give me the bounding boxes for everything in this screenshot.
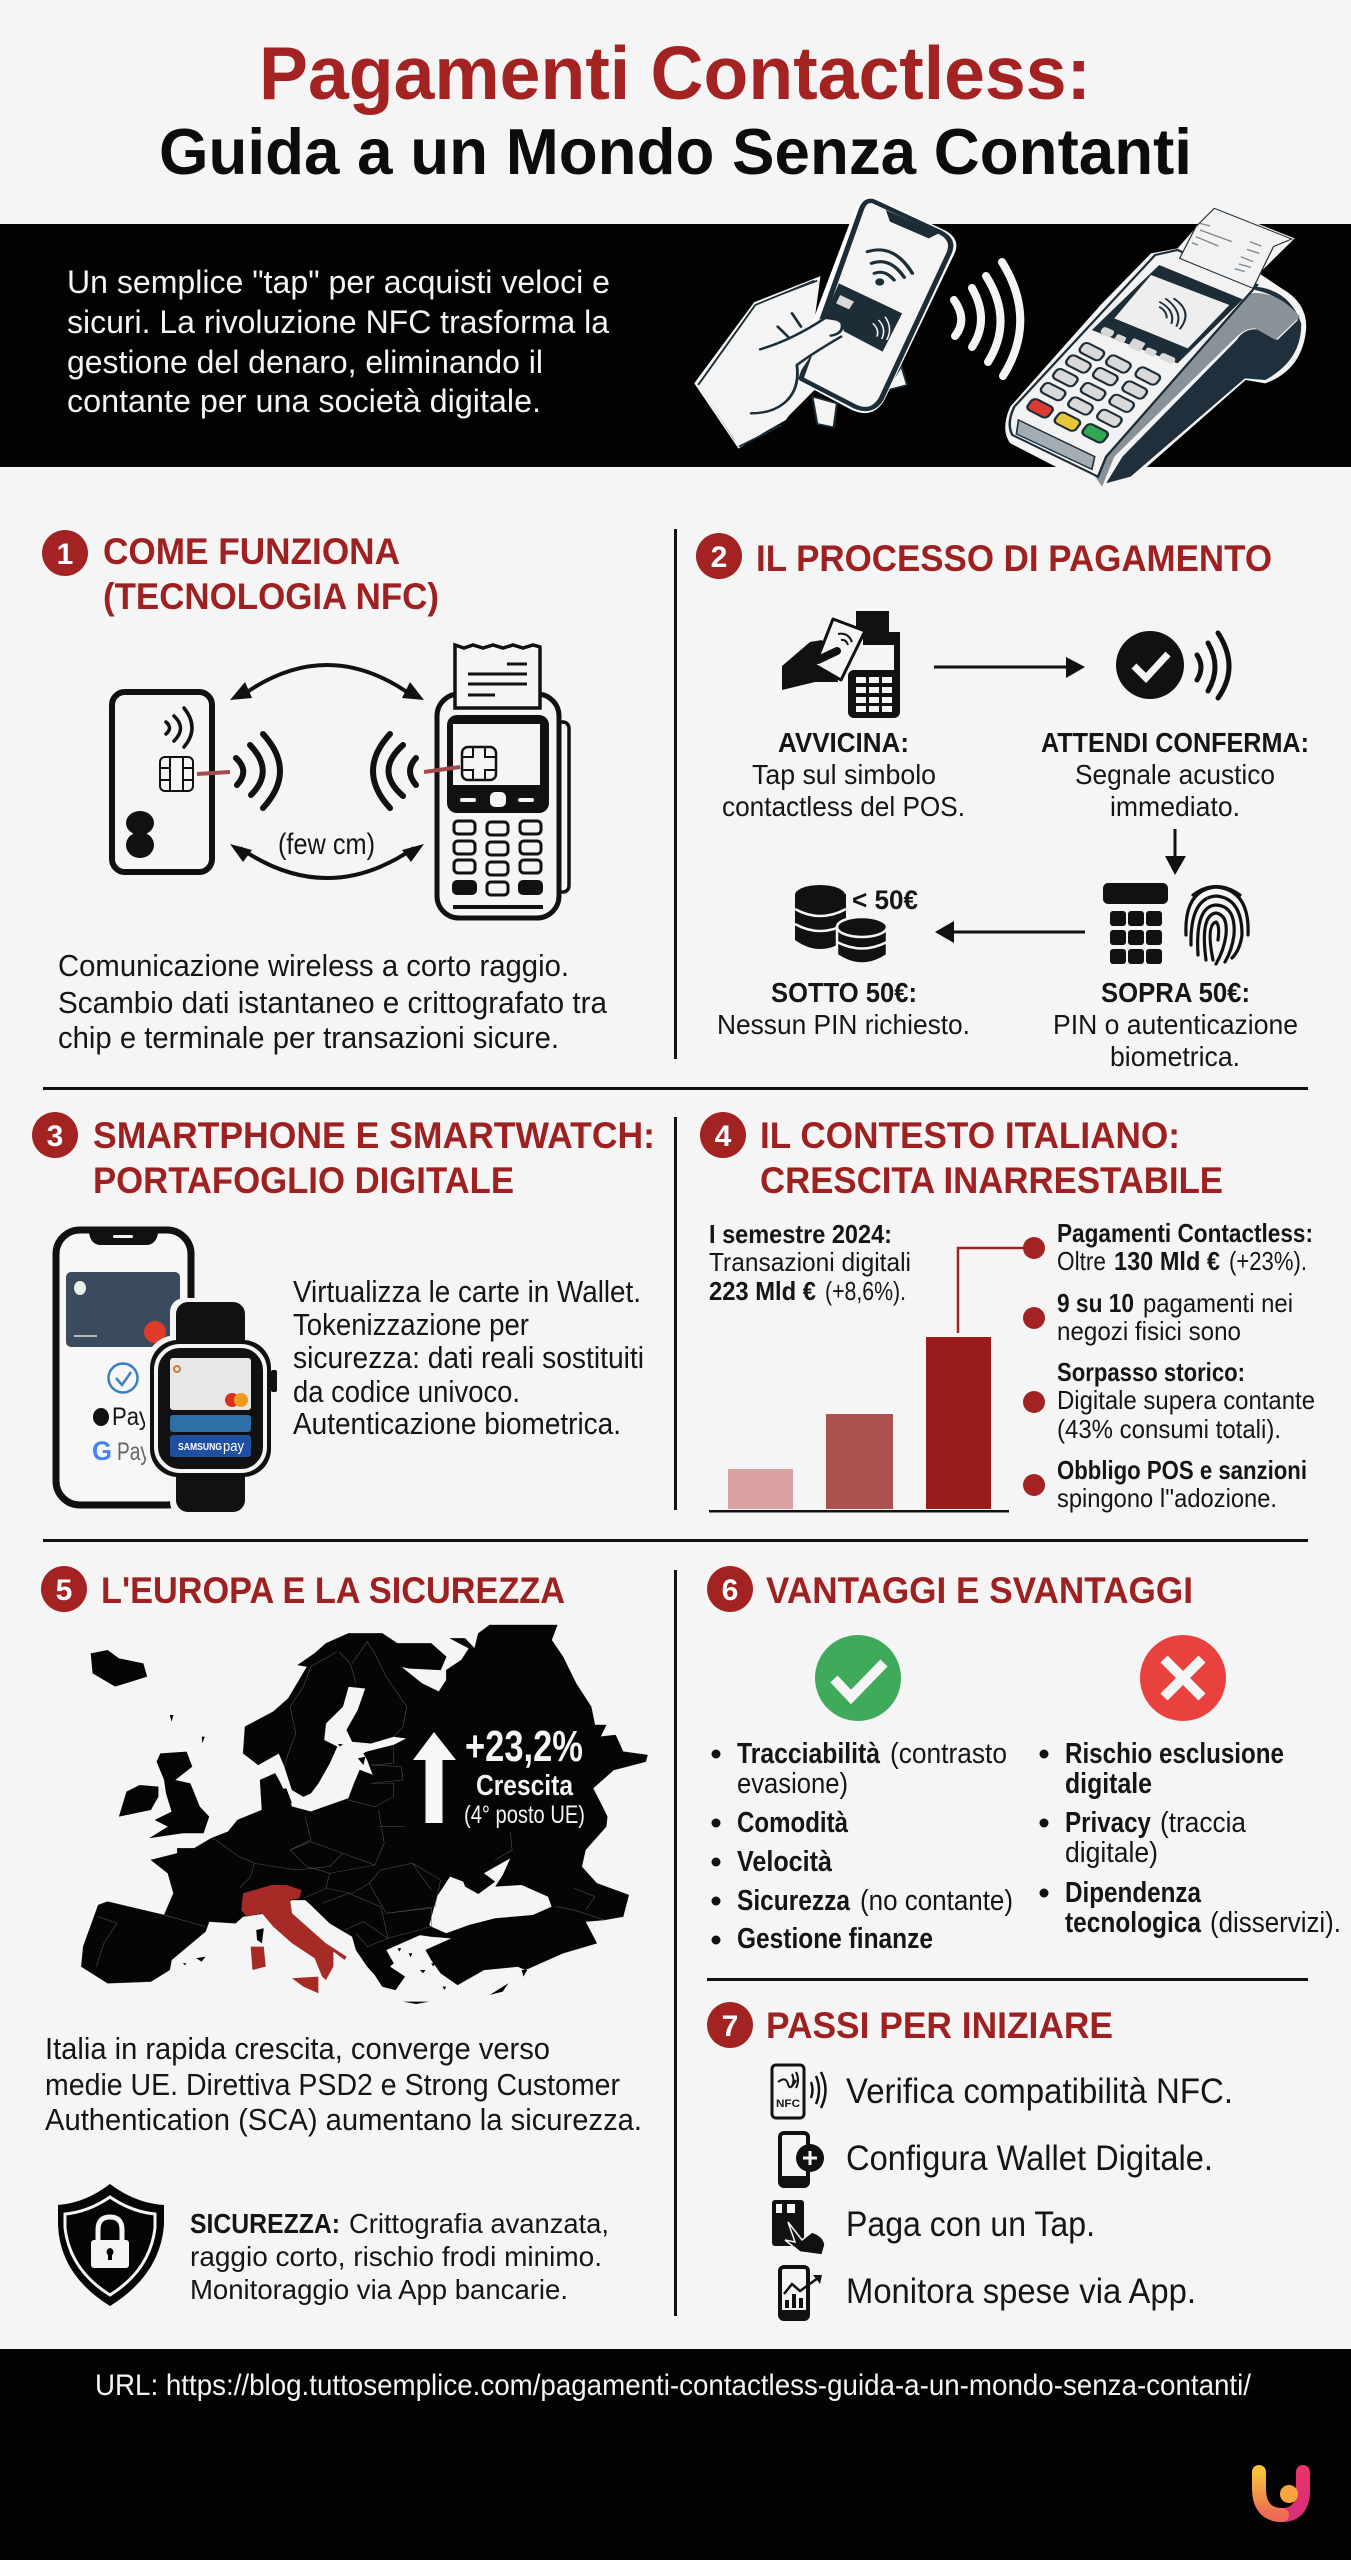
security text: Monitoraggio via App bancarie. <box>190 2274 568 2305</box>
list: svantaggi <box>1040 1738 1341 1939</box>
stat: 9 su 10: 9 su 10 <box>1057 1288 1134 1318</box>
list: vantaggi <box>712 1738 1013 1955</box>
icon: hand holding phone <box>696 199 954 447</box>
intro text <box>67 264 610 419</box>
list: svantaggi: tecnologica <box>1065 1907 1202 1939</box>
stat: semestre: Transazioni digitali <box>709 1247 911 1277</box>
text block 5: Authentication (SCA) aumentano la sicurezza. <box>45 2102 642 2137</box>
list: vantaggi: (contrasto <box>890 1738 1007 1770</box>
list: svantaggi: Rischio esclusione <box>1065 1738 1284 1770</box>
step: attendi conferma: Segnale acustico <box>1075 759 1275 790</box>
intro text: gestione del denaro, eliminando il <box>67 344 543 380</box>
panel: 2 processo di pagamento <box>696 533 1309 1072</box>
step: sotto 50 <box>717 977 970 1040</box>
icon: coins <box>795 885 918 964</box>
panel: 6 vantaggi e svantaggi <box>707 1566 1341 1955</box>
panel: 3 smartphone e smartwatch <box>32 1112 655 1516</box>
list: vantaggi: Gestione finanze <box>737 1923 933 1955</box>
step text 3: Paga con un Tap. <box>846 2205 1095 2244</box>
heading 4: IL CONTESTO ITALIANO: <box>760 1115 1180 1156</box>
heading 3: PORTAFOGLIO DIGITALE <box>93 1160 514 1201</box>
stat: semestre <box>709 1219 911 1306</box>
stat: contactless: Pagamenti Contactless: <box>1057 1218 1313 1248</box>
icon: phone wallet: G <box>92 1436 112 1466</box>
arrow: exchange bottom <box>230 844 424 878</box>
badge 6 <box>707 1566 753 1612</box>
icon: phone wallet <box>56 1230 191 1505</box>
text block 3: Virtualizza le carte in Wallet. <box>293 1274 641 1309</box>
intro text: sicuri. La rivoluzione NFC trasforma la <box>67 304 609 340</box>
icon: keypad <box>1103 883 1168 964</box>
stat: sorpasso: Digitale supera contante <box>1057 1385 1315 1415</box>
step: avvicina: Tap sul simbolo <box>752 759 936 790</box>
text block 3: da codice univoco. <box>293 1374 520 1409</box>
heading 3: SMARTPHONE E SMARTWATCH: <box>93 1115 655 1156</box>
arrow: exchange top <box>230 665 424 700</box>
icon: POS terminal <box>1005 207 1306 491</box>
map of Europe <box>81 1625 648 2004</box>
icon: add wallet <box>780 2133 824 2186</box>
icon: smartwatch: SAMSUNG <box>178 1442 222 1453</box>
text block 3: sicurezza: dati reali sostituiti <box>293 1340 644 1375</box>
stat: contactless: (+23%). <box>1229 1246 1307 1276</box>
icon: tap <box>772 2200 825 2255</box>
icon: smartwatch: pay <box>223 1438 244 1455</box>
badge 2: 2 <box>711 541 727 574</box>
arrow: to confirm <box>934 657 1085 678</box>
map callout: (4° posto UE) <box>464 1801 585 1829</box>
icon: pros check <box>815 1635 901 1721</box>
badge 5: 5 <box>56 1574 72 1607</box>
title <box>159 31 1192 188</box>
text block 5 <box>45 2031 642 2137</box>
map callout: Crescita <box>476 1770 574 1802</box>
stat: obbligo POS: spingono l''adozione. <box>1057 1483 1277 1513</box>
stat: contactless: Oltre <box>1057 1246 1106 1276</box>
icon: waves <box>236 734 416 808</box>
bar chart <box>709 1248 1027 1512</box>
list: svantaggi: Dipendenza <box>1065 1877 1202 1909</box>
icon: smartwatch <box>145 1298 277 1516</box>
heading 6: VANTAGGI E SVANTAGGI <box>766 1570 1193 1611</box>
panel: 1 come funziona <box>42 530 608 1055</box>
stat: sorpasso: (43% consumi totali). <box>1057 1414 1281 1444</box>
text block 3: Autenticazione biometrica. <box>293 1406 621 1441</box>
step: sopra 50: biometrica. <box>1110 1041 1240 1072</box>
heading 1: COME FUNZIONA <box>103 531 400 572</box>
icon: NFC phone <box>772 2065 826 2118</box>
list: vantaggi: Comodità <box>737 1807 849 1839</box>
list: svantaggi: (traccia <box>1160 1807 1247 1839</box>
stat: 9 su 10: pagamenti nei <box>1143 1288 1293 1318</box>
list: vantaggi: (no contante) <box>860 1885 1013 1917</box>
text block 3: Tokenizzazione per <box>293 1307 529 1342</box>
panel: 7 passi per iniziare <box>707 2002 1233 2319</box>
stat: 9 su 10: negozi fisici sono <box>1057 1316 1241 1346</box>
icon: tap on POS <box>782 611 900 718</box>
text block 5: medie UE. Direttiva PSD2 e Strong Customer <box>45 2067 620 2102</box>
icon: monitor spending <box>780 2267 822 2319</box>
text block 1: Scambio dati istantaneo e crittografato tra <box>58 985 608 1020</box>
distance label: (few cm) <box>278 828 375 861</box>
text block 3 <box>293 1274 644 1441</box>
panel: 4 contesto italiano <box>700 1112 1315 1513</box>
title: Guida a un Mondo Senza Contanti <box>159 115 1192 188</box>
step: sotto 50: SOTTO 50€: <box>771 977 917 1008</box>
stat: sorpasso <box>1057 1357 1315 1444</box>
title: Pagamenti Contactless: <box>259 31 1091 115</box>
heading 2: IL PROCESSO DI PAGAMENTO <box>756 538 1272 579</box>
text block 1: Comunicazione wireless a corto raggio. <box>58 948 569 983</box>
intro text: contante per una società digitale. <box>67 383 541 419</box>
icon: POS <box>424 645 569 918</box>
step text 2: Configura Wallet Digitale. <box>846 2139 1213 2178</box>
bullet dots <box>1023 1237 1045 1496</box>
badge 3 <box>32 1112 78 1158</box>
icon: cons cross <box>1140 1635 1226 1721</box>
list: vantaggi: Velocità <box>737 1846 833 1878</box>
security text: SICUREZZA: <box>190 2208 340 2239</box>
badge 3: 3 <box>47 1120 63 1153</box>
icon: check with waves <box>1116 631 1229 699</box>
heading 4: CRESCITA INARRESTABILE <box>760 1160 1223 1201</box>
step: sopra 50: PIN o autenticazione <box>1053 1009 1298 1040</box>
step: avvicina <box>722 727 965 822</box>
stat: obbligo POS: Obbligo POS e sanzioni <box>1057 1455 1307 1485</box>
stat: semestre: 223 Mld € <box>709 1276 816 1306</box>
stat: 9 su 10 <box>1057 1288 1293 1346</box>
panel: intro banner <box>0 199 1351 491</box>
badge 4: 4 <box>715 1120 732 1153</box>
footer <box>0 2349 1351 2560</box>
heading 7: PASSI PER INIZIARE <box>766 2005 1113 2046</box>
security text <box>190 2208 609 2305</box>
stat: contactless <box>1057 1218 1313 1276</box>
icon: NFC phone: NFC <box>776 2098 800 2110</box>
map callout <box>464 1722 585 1829</box>
list: vantaggi: evasione) <box>737 1768 848 1800</box>
stat: obbligo POS <box>1057 1455 1307 1513</box>
icon: contactless waves <box>954 262 1020 376</box>
icon: phone wallet: Pay <box>112 1403 150 1431</box>
arrow: to under 50 <box>935 921 1085 943</box>
heading 1: (TECNOLOGIA NFC) <box>103 576 439 617</box>
heading 3 <box>93 1115 655 1201</box>
icon: security shield <box>58 2184 164 2306</box>
badge 4 <box>700 1112 746 1158</box>
badge 1: 1 <box>57 538 73 571</box>
badge 1 <box>42 530 88 576</box>
intro text: Un semplice "tap" per acquisti veloci e <box>67 264 610 300</box>
list: vantaggi: Sicurezza <box>737 1885 851 1917</box>
badge 6: 6 <box>722 1574 738 1607</box>
stat: semestre: (+8,6%). <box>825 1276 906 1306</box>
step: avvicina: contactless del POS. <box>722 791 965 822</box>
step text 1: Verifica compatibilità NFC. <box>846 2072 1233 2111</box>
step: attendi conferma <box>1041 727 1309 822</box>
icon: coins: < 50€ <box>852 885 918 915</box>
footer URL: URL: https://blog.tuttosemplice.com/pagamenti-contactless-guida-a-un-mondo-senza-contanti/ <box>95 2369 1252 2402</box>
text block 5: Italia in rapida crescita, converge verso <box>45 2031 550 2066</box>
badge 7 <box>707 2002 753 2048</box>
icon: fingerprint <box>1186 886 1248 964</box>
step: sopra 50: SOPRA 50€: <box>1101 977 1250 1008</box>
arrow: down <box>1165 829 1186 875</box>
text block 1: chip e terminale per transazioni sicure. <box>58 1020 559 1055</box>
heading 1 <box>103 531 439 617</box>
step: sopra 50 <box>1053 977 1298 1072</box>
stat: sorpasso: Sorpasso storico: <box>1057 1357 1245 1387</box>
step: attendi conferma: immediato. <box>1110 791 1240 822</box>
list: svantaggi: digitale <box>1065 1768 1152 1800</box>
badge 7: 7 <box>722 2010 738 2043</box>
arrow: growth <box>413 1732 456 1823</box>
icon: phone wallet: Pay <box>117 1438 150 1466</box>
security text: Crittografia avanzata, <box>349 2208 609 2239</box>
logo <box>1259 2472 1303 2515</box>
list: svantaggi: Privacy <box>1065 1807 1151 1839</box>
step: attendi conferma: ATTENDI CONFERMA: <box>1041 727 1309 758</box>
icon: card <box>112 692 230 872</box>
stat: semestre: I semestre 2024: <box>709 1219 892 1249</box>
heading 4 <box>760 1115 1223 1201</box>
step text 4: Monitora spese via App. <box>846 2272 1196 2311</box>
badge 2 <box>696 533 742 579</box>
stat: contactless: 130 Mld € <box>1114 1246 1220 1276</box>
badge 5 <box>41 1566 87 1612</box>
panel: 5 europa e sicurezza <box>41 1566 648 2306</box>
step: sotto 50: Nessun PIN richiesto. <box>717 1009 970 1040</box>
security text: raggio corto, rischio frodi minimo. <box>190 2241 602 2272</box>
list: svantaggi: digitale) <box>1065 1837 1158 1869</box>
step: avvicina: AVVICINA: <box>778 727 909 758</box>
map callout: +23,2% <box>465 1722 583 1771</box>
list: vantaggi: Tracciabilità <box>737 1738 881 1770</box>
text block 1 <box>58 948 608 1055</box>
heading 5: L'EUROPA E LA SICUREZZA <box>101 1570 565 1611</box>
